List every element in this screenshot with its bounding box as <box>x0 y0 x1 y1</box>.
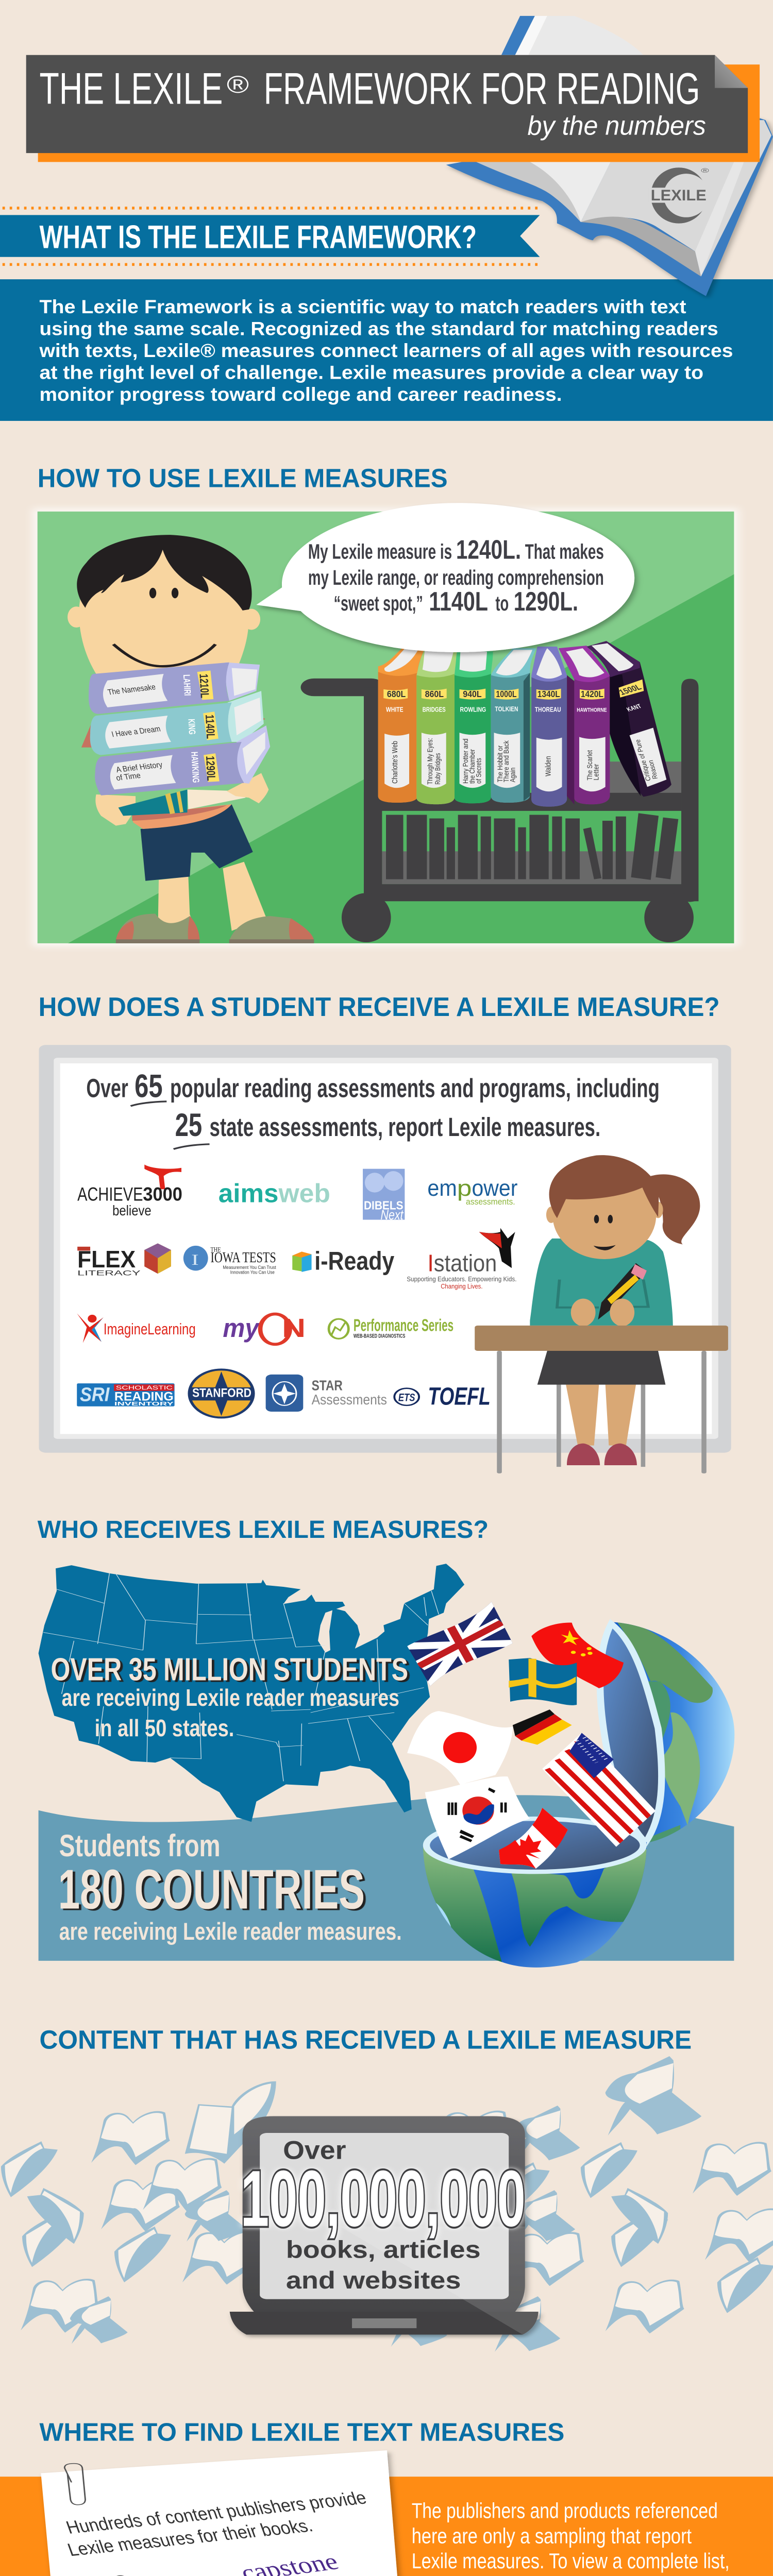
book: The Scarlet Letter: The Scarlet <box>586 750 594 781</box>
logo: empower assessments: ower <box>472 1175 517 1201</box>
book: Charlotte's Web <box>378 645 425 803</box>
stat: 100,000,000 books, articles and websites: Over <box>283 2136 346 2165</box>
logo: Iowa Tests: I <box>191 1252 199 1268</box>
flag: Sweden <box>509 1658 577 1705</box>
book: Harry Potter <box>455 650 493 803</box>
logo: Iowa Tests: Measurement You Can Trust <box>223 1265 276 1270</box>
section: who receives lexile measures: OVER 35 MILLION STUDENTS <box>51 1652 408 1687</box>
stack: The Namesake: 1210L <box>197 673 211 698</box>
speech bubble: My Lexile measure is <box>308 540 452 564</box>
logo: Iowa Tests: THE <box>210 1246 221 1253</box>
callout: 180 countries: Students from <box>59 1828 221 1863</box>
stack: The Namesake: LAHIRI <box>181 674 192 696</box>
logo: SRA FLEX Literacy: FLEX <box>77 1246 136 1273</box>
stack: I Have a Dream: KING <box>186 719 197 735</box>
book: The Scarlet Letter: Letter <box>593 764 600 781</box>
book: Through My Eyes <box>416 650 460 804</box>
panel: green scene <box>32 508 739 946</box>
speech bubble <box>256 503 634 652</box>
logo: empower assessments: em <box>427 1175 457 1201</box>
logo: Stanford <box>189 1369 254 1417</box>
section: how does a student receive a measure: Performance Series <box>354 1316 453 1335</box>
logo: Scholastic Reading Inventory: INVENTORY <box>114 1400 174 1406</box>
title text <box>40 64 706 140</box>
badge: certified partner <box>0 2381 707 2576</box>
stack: I Have a Dream <box>90 691 264 755</box>
speech bubble: 1290L. <box>514 587 578 617</box>
book: The Scarlet Letter <box>559 646 610 804</box>
speech bubble: “sweet spot,” <box>334 592 423 615</box>
logo: aimsweb: aims <box>219 1178 278 1208</box>
book: The Scarlet Letter: HAWTHORNE <box>577 707 607 713</box>
book: The Hobbit: TOLKIEN <box>495 706 518 713</box>
logo: DIBELS Next: Next <box>380 1207 404 1223</box>
book: Critique of Pure Reason: 1500L <box>617 683 644 697</box>
flag: South Korea <box>425 1776 530 1859</box>
logo: STAR Assessments: STAR <box>312 1377 343 1394</box>
stack: The Namesake: The Namesake <box>107 683 157 697</box>
book: Critique of Pure Reason: Critique of Pure <box>634 739 652 781</box>
globe top half <box>600 1620 734 1847</box>
logo: DIBELS Next <box>363 1169 405 1223</box>
book: Harry Potter: 940L <box>463 689 482 699</box>
title text: ® <box>227 71 249 98</box>
stack: A Brief History of Time: 1290L <box>203 756 217 781</box>
speech bubble: to <box>495 592 509 615</box>
section: how to use lexile measures <box>32 463 739 946</box>
logo: ETS TOEFL: ETS <box>398 1391 415 1403</box>
book: The Hobbit <box>491 648 536 803</box>
logo: Istation: I <box>427 1250 434 1277</box>
book: The Hobbit: There and Back <box>503 740 511 782</box>
title banner <box>26 55 760 162</box>
flag: Canada <box>499 1808 568 1869</box>
section: content with a lexile measure <box>1 2025 773 2352</box>
book: Harry Potter: the Chamber <box>469 749 477 784</box>
book: Harry Potter: Harry Potter and <box>462 739 469 784</box>
speech bubble: 1240L. <box>456 535 521 565</box>
logo: myON: my <box>223 1313 260 1343</box>
logo: Imagine Learning <box>77 1313 196 1343</box>
globe bottom half <box>419 1819 651 1968</box>
section: who receives lexile measures: 180 COUNTRIES <box>58 1858 365 1921</box>
handwritten note <box>63 2488 369 2560</box>
speech bubble: 1140L <box>429 587 488 617</box>
logo: STAR Assessments <box>266 1375 387 1412</box>
statement text <box>86 1068 660 1149</box>
text: publishers note <box>412 2499 730 2576</box>
stack: I Have a Dream: I Have a Dream <box>111 724 161 739</box>
logo: Istation <box>407 1228 517 1290</box>
logo: SRA FLEX Literacy: LITERACY <box>77 1269 141 1277</box>
logo: Iowa Tests: Innovation You Can Use <box>230 1269 275 1275</box>
book: Charlotte's Web: Charlotte's Web <box>391 741 399 784</box>
logo: Iowa Tests: IOWA TESTS <box>210 1249 276 1265</box>
logo: aimsweb: web <box>278 1178 330 1208</box>
flag: Germany <box>513 1709 572 1745</box>
book cart <box>301 679 699 942</box>
logo: Achieve3000: believe <box>112 1202 152 1218</box>
callout: 180 countries <box>58 1828 402 1945</box>
stack: A Brief History of Time <box>95 725 270 795</box>
flag: Japan <box>407 1711 513 1786</box>
panel: clipped paper <box>41 2450 415 2576</box>
logo: Scholastic Reading Inventory: SCHOLASTIC <box>116 1385 173 1391</box>
boy character <box>68 535 314 943</box>
book: Through My Eyes: Through My Eyes: <box>427 738 434 785</box>
heading: WHO RECEIVES LEXILE MEASURES? <box>38 1515 489 1543</box>
book: Walden: Walden <box>544 756 552 776</box>
flag: United Kingdom <box>407 1602 513 1686</box>
callout: over 35 million students: in all 50 states. <box>95 1715 234 1741</box>
stat: 100,000,000 books, articles and websites: and websites <box>286 2266 461 2294</box>
callout: over 35 million students: are receiving Lexile reader measures <box>62 1684 399 1711</box>
ribbon heading: what is the lexile framework <box>0 208 540 264</box>
book: Walden: THOREAU <box>535 706 561 713</box>
icon: open Lexile book: LEXILE <box>651 187 707 204</box>
intro paragraph <box>39 296 733 405</box>
scattered open books <box>1 2056 773 2352</box>
logo: Iowa Tests <box>183 1246 276 1275</box>
logo: myON: N <box>282 1313 306 1343</box>
book: Charlotte's Web: WHITE <box>386 706 404 713</box>
logo: Performance Series <box>329 1316 453 1339</box>
book: Critique of Pure Reason: Reason <box>647 760 660 779</box>
stat: 100,000,000 books, articles and websites <box>241 2136 526 2294</box>
logo: Imagine Learning: ImagineLearning <box>104 1320 196 1338</box>
logo: i-Ready <box>292 1247 394 1275</box>
logo: empower assessments: assessments. <box>466 1197 515 1207</box>
section: who receives lexile measures: are receiving Lexile reader measures. <box>59 1918 402 1945</box>
section: who receives lexile measures <box>38 1515 734 1968</box>
statement text: Over <box>86 1073 128 1103</box>
logo: Achieve3000 <box>77 1164 182 1218</box>
logo: Scholastic Reading Inventory: READING <box>114 1389 174 1403</box>
stack: I Have a Dream: 1140L <box>203 715 217 739</box>
girl at desk <box>475 1155 728 1473</box>
book: Through My Eyes: Ruby Bridges <box>435 753 442 785</box>
logo: ETS TOEFL: TOEFL <box>428 1382 491 1411</box>
logo: Istation: Supporting Educators. Empowering Kids. <box>407 1276 517 1283</box>
heading: HOW TO USE LEXILE MEASURES <box>38 463 448 493</box>
logo: Achieve3000: 3000 <box>143 1183 182 1205</box>
logo: Performance Series: WEB-BASED DIAGNOSTICS <box>354 1332 405 1339</box>
flag: United States <box>542 1733 661 1847</box>
logo: Istation: Changing Lives. <box>441 1283 483 1290</box>
book: The Hobbit: The Hobbit or <box>497 745 504 782</box>
handwritten note: Lexile measures for their books. <box>65 2516 315 2560</box>
flag: China <box>531 1622 624 1688</box>
logo: Scholastic Reading Inventory <box>77 1383 175 1406</box>
logo: Achieve3000: ACHIEVE <box>77 1183 143 1205</box>
logo: empower assessments <box>427 1175 517 1207</box>
book: Charlotte's Web: 680L <box>387 689 406 699</box>
logo: DIBELS Next: DIBELS <box>364 1199 403 1212</box>
book: Through My Eyes: BRIDGES <box>423 706 446 713</box>
logo: STAR Assessments: Assessments <box>312 1392 387 1408</box>
stack: The Namesake <box>89 663 260 714</box>
laptop <box>230 2116 539 2334</box>
stack: A Brief History of Time: A Brief History <box>115 760 163 774</box>
section: header <box>0 16 773 421</box>
callout: over 35 million students <box>51 1652 408 1741</box>
logo: myON <box>223 1313 306 1344</box>
book: The Hobbit: Again <box>510 768 517 782</box>
stat: 100,000,000 books, articles and websites: books, articles <box>286 2236 481 2263</box>
logo: Stanford: STANFORD <box>192 1385 251 1400</box>
book: Through My Eyes: 860L <box>425 689 444 699</box>
intro band <box>0 279 773 421</box>
orange band <box>0 2477 773 2576</box>
title text: THE LEXILE <box>40 64 223 113</box>
book: The Hobbit: 1000L <box>496 689 517 699</box>
book: Walden: 1340L <box>537 689 560 699</box>
logo: i-Ready: i-Ready <box>314 1247 394 1275</box>
icon: open Lexile book: ® <box>701 167 709 174</box>
book: Critique of Pure Reason: KANT <box>626 703 643 713</box>
handwritten note: Hundreds of content publishers provide <box>63 2488 369 2538</box>
book: Walden <box>531 647 567 807</box>
speech bubble: That makes <box>525 540 604 564</box>
logo: Scholastic Reading Inventory: SRI <box>80 1384 110 1405</box>
map: United States <box>39 1564 464 1822</box>
section: where to find lexile text measures <box>0 2418 773 2576</box>
icon: paperclip <box>64 2464 85 2505</box>
book: Critique of Pure Reason <box>586 641 671 796</box>
section: how does a student receive a measure <box>39 992 731 1473</box>
statement text: 25 <box>175 1107 202 1143</box>
icon: open Lexile book <box>446 16 773 296</box>
logo: Istation: station <box>434 1250 497 1277</box>
panel: whiteboard <box>39 1045 731 1453</box>
book: Harry Potter: of Secrets <box>476 758 483 784</box>
wave panel <box>39 1795 734 1961</box>
book: Harry Potter: ROWLING <box>460 706 486 713</box>
book: The Scarlet Letter: 1420L <box>581 689 603 699</box>
logo: ABDO <box>105 2574 204 2576</box>
stack: A Brief History of Time: of Time <box>115 771 142 783</box>
logo: empower assessments: p <box>457 1175 472 1201</box>
logo: ETS TOEFL <box>394 1382 491 1411</box>
stack: A Brief History of Time: HAWKING <box>189 752 201 783</box>
statement text: 65 <box>135 1068 163 1105</box>
